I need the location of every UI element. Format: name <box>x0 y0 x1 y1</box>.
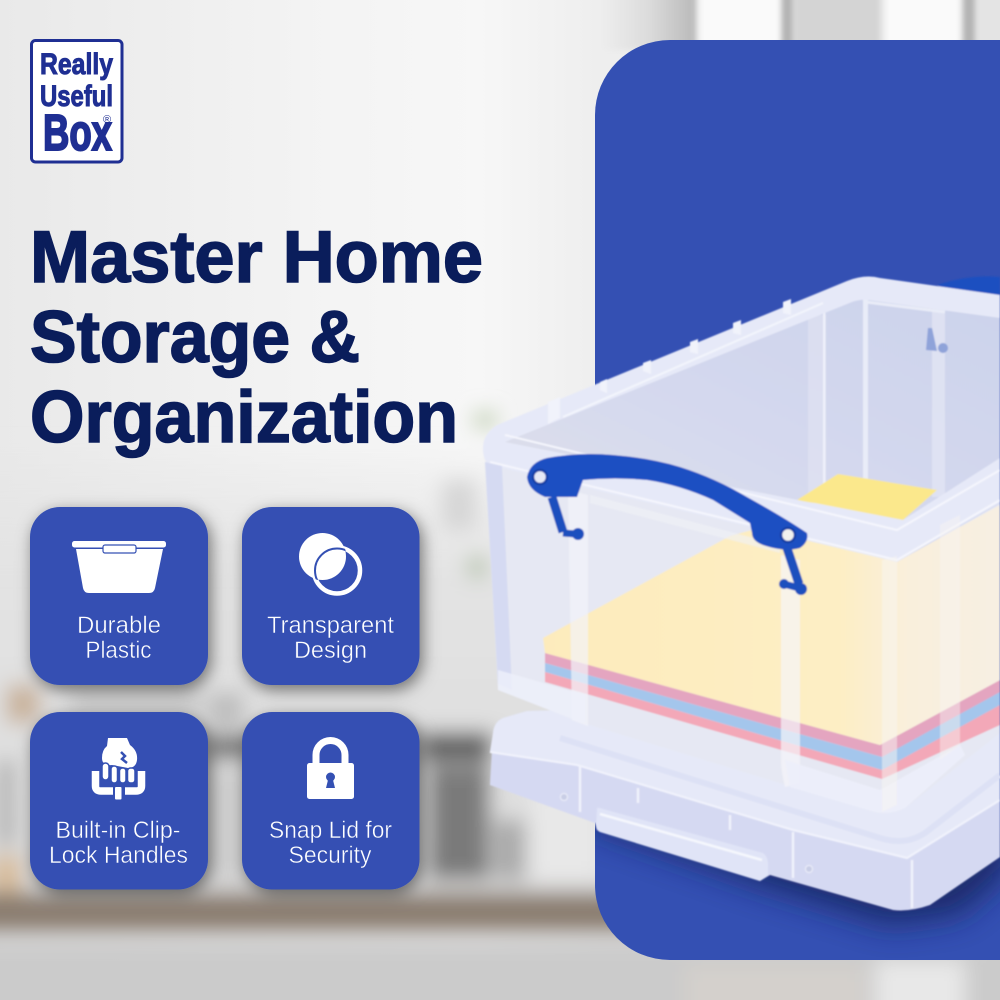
blue backing panel <box>590 40 1000 960</box>
icon: hand gripping handle <box>96 738 142 800</box>
label: snap lid <box>269 817 392 869</box>
title <box>30 217 483 458</box>
label: snap lid: Snap Lid for <box>269 817 392 844</box>
logo: Really Useful Box: ® <box>103 114 111 126</box>
box corner pillars <box>485 462 965 813</box>
blue carry handle <box>527 454 807 595</box>
logo: Really Useful Box: Box <box>43 104 112 161</box>
card: snap lid <box>242 712 420 890</box>
box lid <box>490 700 1000 910</box>
icon: overlapping circles <box>299 533 360 594</box>
label: durable plastic: Durable <box>77 612 161 639</box>
title: Storage & <box>30 297 360 378</box>
label: transparent design: Design <box>294 637 367 664</box>
paper stack <box>543 505 1000 779</box>
label: transparent design <box>267 612 394 664</box>
logo: Really Useful Box: Really <box>40 48 113 81</box>
icon: padlock <box>307 740 354 799</box>
label: snap lid: Security <box>288 842 372 869</box>
label: durable plastic <box>77 612 161 664</box>
title: Organization <box>30 377 458 458</box>
interior ribs <box>808 298 945 505</box>
logo: Really Useful Box <box>32 40 122 162</box>
box rim <box>483 277 1000 562</box>
label: clip-lock handles <box>49 817 188 869</box>
card: durable plastic <box>30 507 208 685</box>
box front face <box>485 462 1000 813</box>
label: clip-lock handles: Built-in Clip- <box>56 817 180 844</box>
title: Master Home <box>30 217 483 298</box>
label: transparent design: Transparent <box>267 612 394 639</box>
icon: storage box <box>72 541 166 593</box>
card: transparent design <box>242 507 420 685</box>
far handle blue tip <box>937 276 1000 300</box>
card: clip-lock handles <box>30 712 208 890</box>
box interior back wall <box>497 286 1000 530</box>
label: durable plastic: Plastic <box>86 637 152 664</box>
yellow sheet seen through box <box>797 474 937 520</box>
product: clear storage box with lid <box>483 276 1000 910</box>
far handle ghost <box>924 291 965 353</box>
label: clip-lock handles: Lock Handles <box>49 842 188 869</box>
logo: Really Useful Box: Useful <box>40 80 113 113</box>
